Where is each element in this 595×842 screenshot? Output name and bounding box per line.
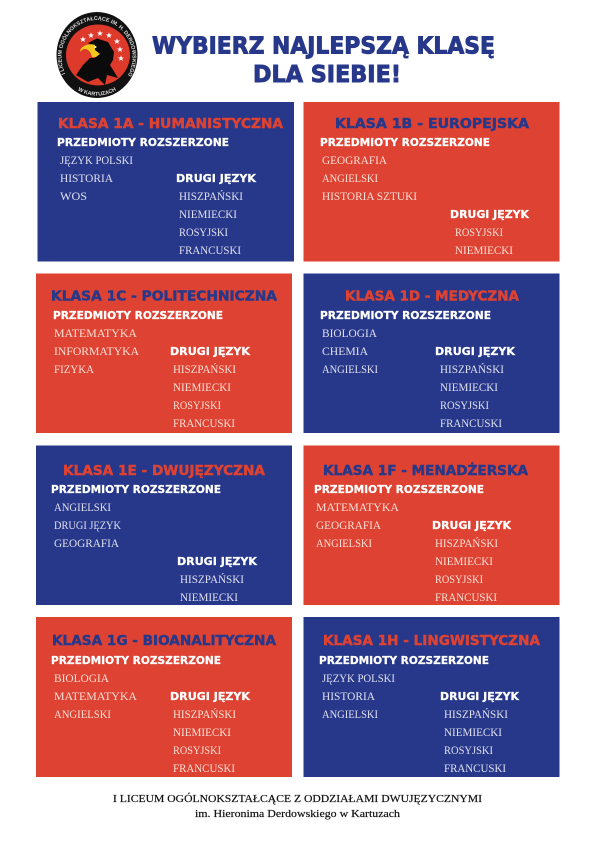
subject list: BIOLOGIA [54,671,109,685]
subject list: ANGIELSKI [322,707,378,721]
language list: HISZPAŃSKI [173,707,236,721]
language list: NIEMIECKI [173,725,231,739]
footer text [113,793,482,820]
subheading: drugi język: DRUGI JĘZYK [170,691,251,703]
language list: NIEMIECKI [455,243,513,257]
heading: klasa 1F: KLASA 1F - MENADŻERSKA [323,462,529,479]
language list [180,572,244,604]
subheading: przedmioty rozszerzone: PRZEDMIOTY ROZSZERZONE [320,310,491,322]
logo: school emblem: I LICEUM OGÓLNOKSZTAŁCĄCE IM. H. DERDOWSKIEGO [58,16,136,76]
language list: NIEMIECKI [444,725,502,739]
language list: FRANCUSKI [435,590,497,604]
subheading: przedmioty rozszerzone: PRZEDMIOTY ROZSZERZONE [57,137,229,149]
language list: FRANCUSKI [173,761,235,775]
panel: klasa 1D [304,274,560,433]
language list: ROSYJSKI [440,398,489,412]
language list [179,189,243,257]
subject list: GEOGRAFIA [322,153,387,167]
language list: HISZPAŃSKI [179,189,243,203]
language list: FRANCUSKI [440,416,502,430]
subject list [316,500,399,550]
title: DLA SIEBIE! [253,62,401,88]
subheading: przedmioty rozszerzone: PRZEDMIOTY ROZSZERZONE [319,655,489,667]
heading: klasa 1B: KLASA 1B - EUROPEJSKA [335,116,530,132]
language list: ROSYJSKI [173,398,221,412]
subject list: FIZYKA [54,362,94,376]
subject list: GEOGRAFIA [316,518,381,532]
subheading: drugi język: DRUGI JĘZYK [450,209,530,221]
subject list: DRUGI JĘZYK [54,518,121,532]
subject list: CHEMIA [322,344,368,358]
subject list [322,671,395,721]
language list: NIEMIECKI [435,554,493,568]
language list: NIEMIECKI [440,380,498,394]
subject list: ANGIELSKI [316,536,372,550]
subheading: drugi język: DRUGI JĘZYK [435,346,516,358]
language list: HISZPAŃSKI [435,536,498,550]
subject list [60,153,133,203]
heading: klasa 1E: KLASA 1E - DWUJĘZYCZNA [63,463,266,479]
subject list: HISTORIA [60,171,113,185]
title: WYBIERZ NAJLEPSZĄ KLASĘ [152,34,495,60]
heading: klasa 1A: KLASA 1A - HUMANISTYCZNA [58,116,284,132]
panel: klasa 1B [304,102,560,262]
subheading: przedmioty rozszerzone: PRZEDMIOTY ROZSZERZONE [51,484,221,496]
subject list: ANGIELSKI [322,171,378,185]
language list: ROSYJSKI [179,225,228,239]
language list [173,707,236,775]
subheading: przedmioty rozszerzone: PRZEDMIOTY ROZSZERZONE [320,137,490,149]
subject list: HISTORIA [322,689,375,703]
subheading: drugi język: DRUGI JĘZYK [440,691,520,703]
panel: klasa 1G [36,617,292,777]
language list: ROSYJSKI [455,225,503,239]
logo: school emblem: ★ [96,29,104,38]
subject list: JĘZYK POLSKI [60,153,133,167]
subject list: MATEMATYKA [54,689,137,703]
subject list: MATEMATYKA [54,326,137,340]
subject list: ANGIELSKI [322,362,378,376]
subheading: drugi język: DRUGI JĘZYK [177,556,258,568]
panel: klasa 1A [38,102,294,262]
subject list [54,500,121,550]
heading: klasa 1H: KLASA 1H - LINGWISTYCZNA [323,633,541,649]
language list [173,362,236,430]
subject list [322,153,417,203]
title [152,34,495,88]
language list: HISZPAŃSKI [444,707,508,721]
heading: klasa 1C: KLASA 1C - POLITECHNICZNA [51,288,278,304]
language list [455,225,513,257]
subject list [54,326,139,376]
logo: school emblem: ★ [79,35,87,44]
language list: HISZPAŃSKI [440,362,504,376]
footer text: I LICEUM OGÓLNOKSZTAŁCĄCE Z ODDZIAŁAMI DWUJĘZYCZNYMI [113,793,482,805]
language list: FRANCUSKI [173,416,235,430]
logo: school emblem [56,12,138,98]
subheading: drugi język: DRUGI JĘZYK [170,346,251,358]
panel: klasa 1H [304,617,560,777]
subject list: GEOGRAFIA [54,536,119,550]
language list: FRANCUSKI [444,761,506,775]
heading: klasa 1D: KLASA 1D - MEDYCZNA [345,288,520,304]
subject list: BIOLOGIA [322,326,377,340]
language list: NIEMIECKI [173,380,231,394]
language list: NIEMIECKI [179,207,237,221]
logo: school emblem: ★ [105,31,113,40]
subheading: przedmioty rozszerzone: PRZEDMIOTY ROZSZERZONE [314,484,484,496]
subheading: przedmioty rozszerzone: PRZEDMIOTY ROZSZERZONE [51,655,221,667]
subject list: ANGIELSKI [54,707,111,721]
language list: NIEMIECKI [180,590,238,604]
subject list [322,326,378,376]
subheading: drugi język: DRUGI JĘZYK [432,520,512,532]
language list [444,707,508,775]
language list: ROSYJSKI [173,743,221,757]
logo: school emblem: W KARTUZACH [78,87,116,96]
language list: ROSYJSKI [444,743,493,757]
subject list [54,671,137,721]
subject list: WOS [60,189,87,203]
logo: school emblem: ★ [117,54,125,63]
language list: HISZPAŃSKI [180,572,244,586]
language list [435,536,498,604]
language list: ROSYJSKI [435,572,483,586]
panel: klasa 1C [36,274,292,433]
subject list: JĘZYK POLSKI [322,671,395,685]
footer text: im. Hieronima Derdowskiego w Kartuzach [195,808,401,820]
subject list: ANGIELSKI [54,500,111,514]
subject list: HISTORIA SZTUKI [322,189,417,203]
heading: klasa 1G: KLASA 1G - BIOANALITYCZNA [52,633,277,649]
logo: school emblem: ★ [116,45,124,54]
subheading: przedmioty rozszerzone: PRZEDMIOTY ROZSZERZONE [53,310,223,322]
panel: klasa 1F [304,446,560,605]
subject list: INFORMATYKA [54,344,139,358]
subject list: MATEMATYKA [316,500,399,514]
panel: klasa 1E [36,446,292,605]
language list: HISZPAŃSKI [173,362,236,376]
subheading: drugi język: DRUGI JĘZYK [176,173,257,185]
logo: school emblem: ★ [87,31,95,40]
language list [440,362,504,430]
language list: FRANCUSKI [179,243,241,257]
logo: school emblem: ★ [113,37,121,46]
